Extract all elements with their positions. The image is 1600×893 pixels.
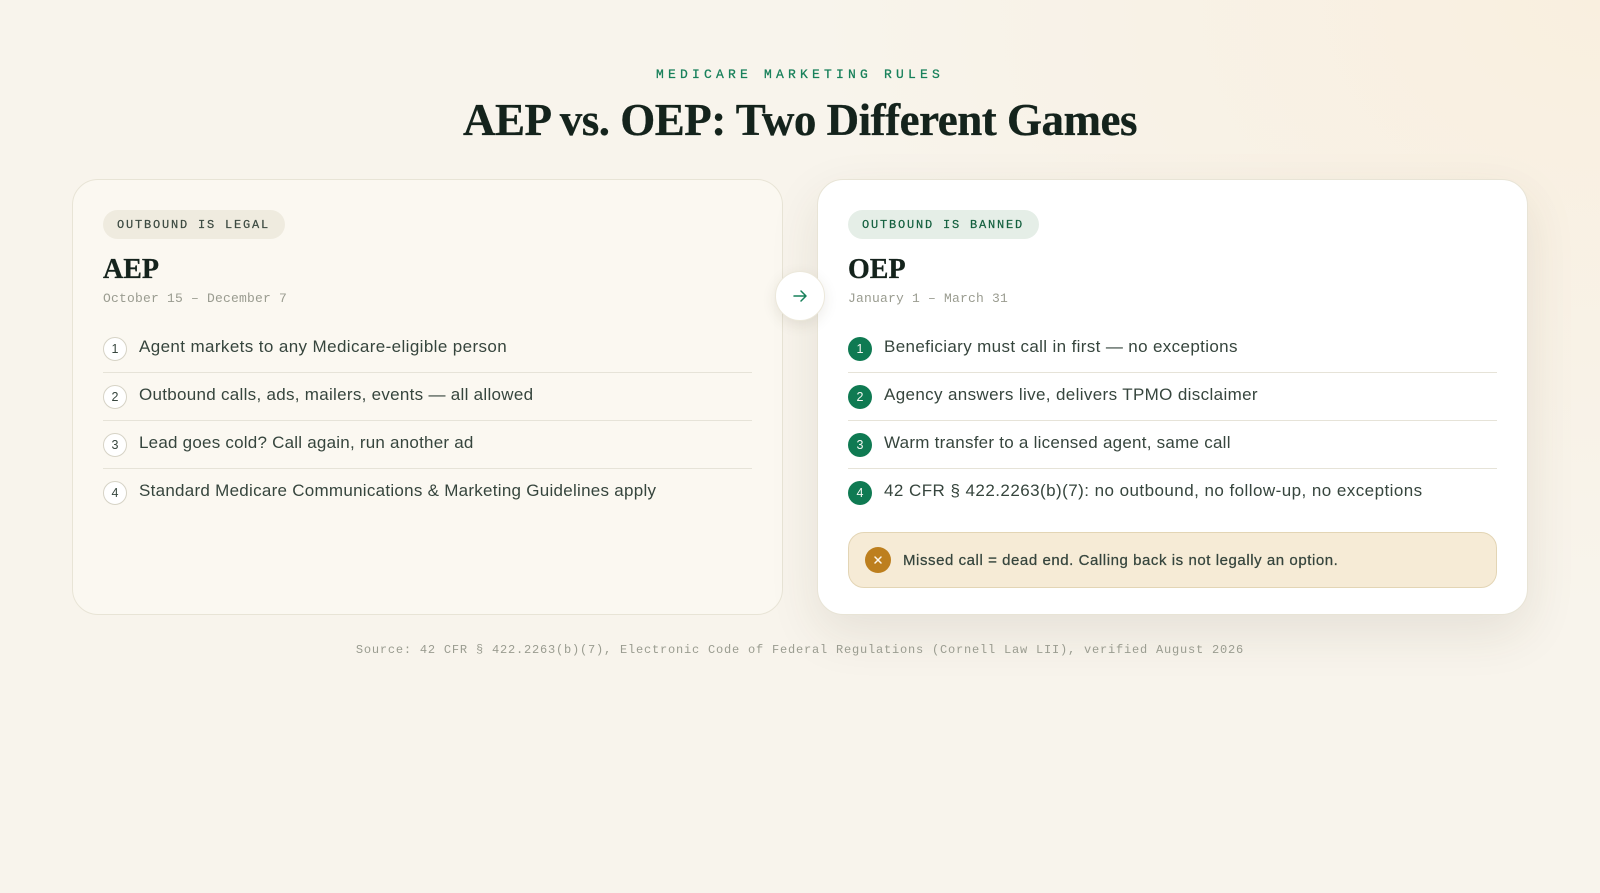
step 3 [103,433,752,469]
step 2 [103,385,752,421]
step 4: Standard Medicare Communications & Marketing Guidelines apply [139,481,656,500]
arrow connector [775,271,825,321]
step 3 [848,433,1497,469]
step 2: 2 [112,390,118,404]
eyebrow label: MEDICARE MARKETING RULES [656,67,944,82]
step 2: Outbound calls, ads, mailers, events — all allowed [139,385,533,404]
step 4: 42 CFR § 422.2263(b)(7): no outbound, no follow-up, no exceptions [884,481,1423,500]
step 1: Agent markets to any Medicare-eligible person [139,337,507,356]
step 3: Warm transfer to a licensed agent, same call [884,433,1231,452]
step 3: Lead goes cold? Call again, run another ad [139,433,474,452]
step 2: Agency answers live, delivers TPMO disclaimer [884,385,1258,404]
callout text: Missed call = dead end. Calling back is not legally an option. [903,552,1338,569]
badge: outbound is legal: OUTBOUND IS LEGAL [117,218,270,232]
badge: outbound is banned: OUTBOUND IS BANNED [862,218,1024,232]
badge: outbound is legal [103,210,285,239]
heading: AEP: AEP [103,254,159,285]
panel: OEP [817,179,1528,615]
step 4: 4 [857,486,863,500]
heading: OEP: OEP [848,254,906,285]
source note: Source: 42 CFR § 422.2263(b)(7), Electronic Code of Federal Regulations (Cornell Law LII), verified August 2026 [356,643,1244,657]
step 2: 2 [857,390,863,404]
step 1: Beneficiary must call in first — no exceptions [884,337,1238,356]
step 3: 3 [857,438,863,452]
step list: OEP [848,337,1497,505]
step 4: 4 [112,486,118,500]
step 1 [848,337,1497,373]
panel: AEP [72,179,783,615]
step 1: 1 [857,342,863,356]
step 2 [848,385,1497,421]
title: AEP vs. OEP: Two Different Games [463,95,1137,145]
step 1 [103,337,752,373]
dates: AEP: October 15 – December 7 [103,291,287,306]
dates: OEP: January 1 – March 31 [848,291,1008,306]
step 1: 1 [112,342,118,356]
badge: outbound is banned [848,210,1039,239]
step 3: 3 [112,438,118,452]
icon: x mark [865,547,891,573]
step list: AEP [103,337,752,505]
callout: missed call [848,532,1497,588]
